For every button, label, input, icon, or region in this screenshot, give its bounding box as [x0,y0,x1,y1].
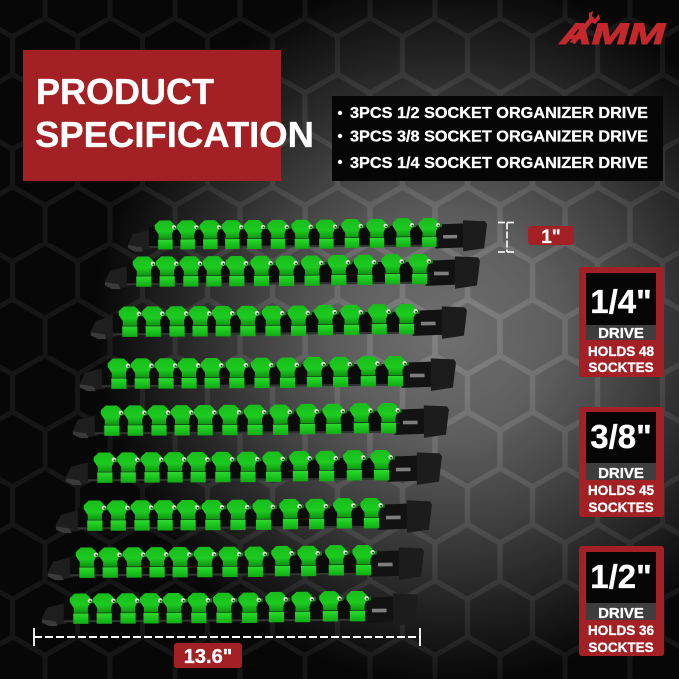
socket rail 4 [80,356,456,393]
list text [338,105,648,172]
socket rail 9 [42,591,418,628]
badge: 1/2 drive: DRIVE [598,605,644,622]
badge: 1/4 drive: 1/4" [590,283,652,320]
socket rail 8 [48,545,424,582]
badge: 1/2 drive: 1/2" [590,558,652,595]
badge: 1/4 drive [579,267,664,377]
badge: 3/8 drive: DRIVE [598,465,644,482]
panel: contents list [332,96,663,181]
socket rail 6 [66,450,442,487]
badge: 1/2 drive: HOLDS 36 [588,623,654,638]
list text: 3PCS 3/8 SOCKET ORGANIZER DRIVE [350,128,648,146]
title [35,71,314,155]
badge: 3/8 drive: HOLDS 45 [588,483,654,498]
socket rail 1 [128,218,487,253]
socket rail 2 [105,254,480,291]
height dimension marker [498,222,574,252]
panel: title block [23,50,314,181]
socket rail 7 [56,498,432,535]
logo: AMM brand [559,11,666,51]
list text: 3PCS 1/4 SOCKET ORGANIZER DRIVE [350,155,648,172]
logo wordmark: AMM [559,18,666,51]
title: SPECIFICATION [35,114,314,155]
badge: 1/4 drive: SOCKTES [588,360,654,375]
badge: 1/4 drive: HOLDS 48 [588,344,654,359]
height dimension marker: 1" [541,227,561,248]
badge: 3/8 drive: SOCKTES [588,500,654,515]
badge: 1/2 drive [579,546,664,656]
badge: 1/2 drive: SOCKTES [588,640,654,655]
icon: wrench on logo [570,11,600,44]
badge: 1/4 drive: DRIVE [598,325,644,342]
socket rail 3 [91,304,467,341]
title: PRODUCT [36,71,214,112]
badge: 3/8 drive: 3/8" [590,418,652,455]
socket rail 5 [73,403,449,440]
list text: 3PCS 1/2 SOCKET ORGANIZER DRIVE [350,105,648,122]
length dimension marker: 13.6" [184,646,232,668]
length dimension marker [34,628,421,668]
badge: 3/8 drive [579,407,664,517]
